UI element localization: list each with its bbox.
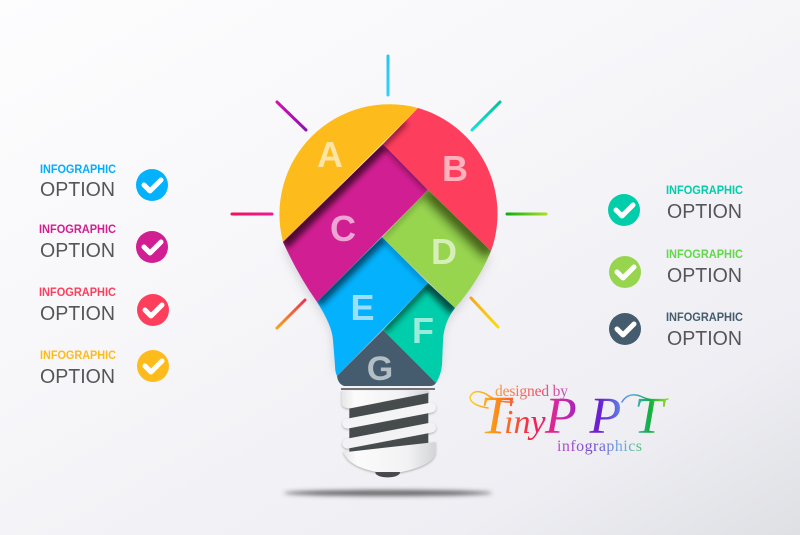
right option 2 — [609, 249, 743, 288]
left option 2: OPTION — [40, 240, 115, 262]
thread band 2 — [342, 403, 436, 429]
logo tagline: designed by — [495, 383, 568, 400]
right option 2: INFOGRAPHIC — [666, 249, 743, 261]
ray: upper right — [472, 102, 500, 130]
collar ring — [341, 387, 435, 391]
logo word PPT: PPT — [544, 388, 666, 445]
left option 4: OPTION — [40, 366, 115, 388]
ray: lower left — [277, 300, 305, 328]
left option 4: INFOGRAPHIC — [40, 350, 116, 362]
bulb screw base — [341, 389, 436, 477]
left option 1: INFOGRAPHIC — [40, 164, 116, 176]
left option 1: OPTION — [40, 179, 115, 201]
right option 3: OPTION — [667, 328, 742, 350]
ray: right — [507, 212, 546, 216]
segment E: E — [350, 287, 375, 328]
right option 3: INFOGRAPHIC — [666, 312, 743, 324]
segment F: F — [412, 310, 434, 351]
left option 4 — [40, 350, 169, 388]
logo word Tiny: T — [480, 385, 514, 445]
cap dome — [343, 442, 436, 472]
right option 3 — [609, 312, 743, 350]
ray: lower right — [471, 298, 498, 327]
segment G — [337, 330, 436, 388]
right option 1 — [608, 185, 743, 226]
left option 2 — [39, 224, 168, 263]
ground shadow — [284, 490, 492, 496]
logo: designed by Tiny PPT infographics — [470, 383, 668, 455]
segment C — [283, 144, 428, 302]
segment B — [380, 108, 498, 251]
left option 2: INFOGRAPHIC — [39, 224, 116, 236]
left option 1 — [40, 164, 168, 201]
segment A: A — [317, 134, 343, 175]
segment D: D — [431, 231, 457, 272]
thread band 3 — [342, 423, 436, 449]
ray: upper left — [277, 102, 306, 130]
segment D — [382, 190, 491, 308]
segment G: G — [367, 350, 393, 388]
segment B: B — [442, 148, 468, 189]
segment C: C — [330, 208, 356, 249]
right option 2: OPTION — [667, 265, 742, 287]
segment A — [279, 104, 418, 242]
left option 3: INFOGRAPHIC — [39, 287, 116, 299]
contact tip — [375, 468, 400, 477]
light bulb — [279, 104, 498, 388]
logo word Tiny: iny — [504, 404, 546, 441]
segment F — [383, 283, 455, 383]
right option 1: INFOGRAPHIC — [666, 185, 743, 197]
segment E — [317, 237, 428, 376]
left option 3 — [39, 287, 169, 326]
ray: top — [386, 56, 390, 95]
right option 1: OPTION — [667, 201, 742, 223]
thread core — [349, 392, 428, 453]
bulb soft shadow — [283, 246, 491, 372]
logo subtitle: infographics — [557, 438, 642, 455]
thread band 1 — [342, 391, 428, 408]
ray: left — [232, 212, 272, 216]
logo swash — [470, 392, 668, 408]
left option 3: OPTION — [40, 303, 115, 325]
